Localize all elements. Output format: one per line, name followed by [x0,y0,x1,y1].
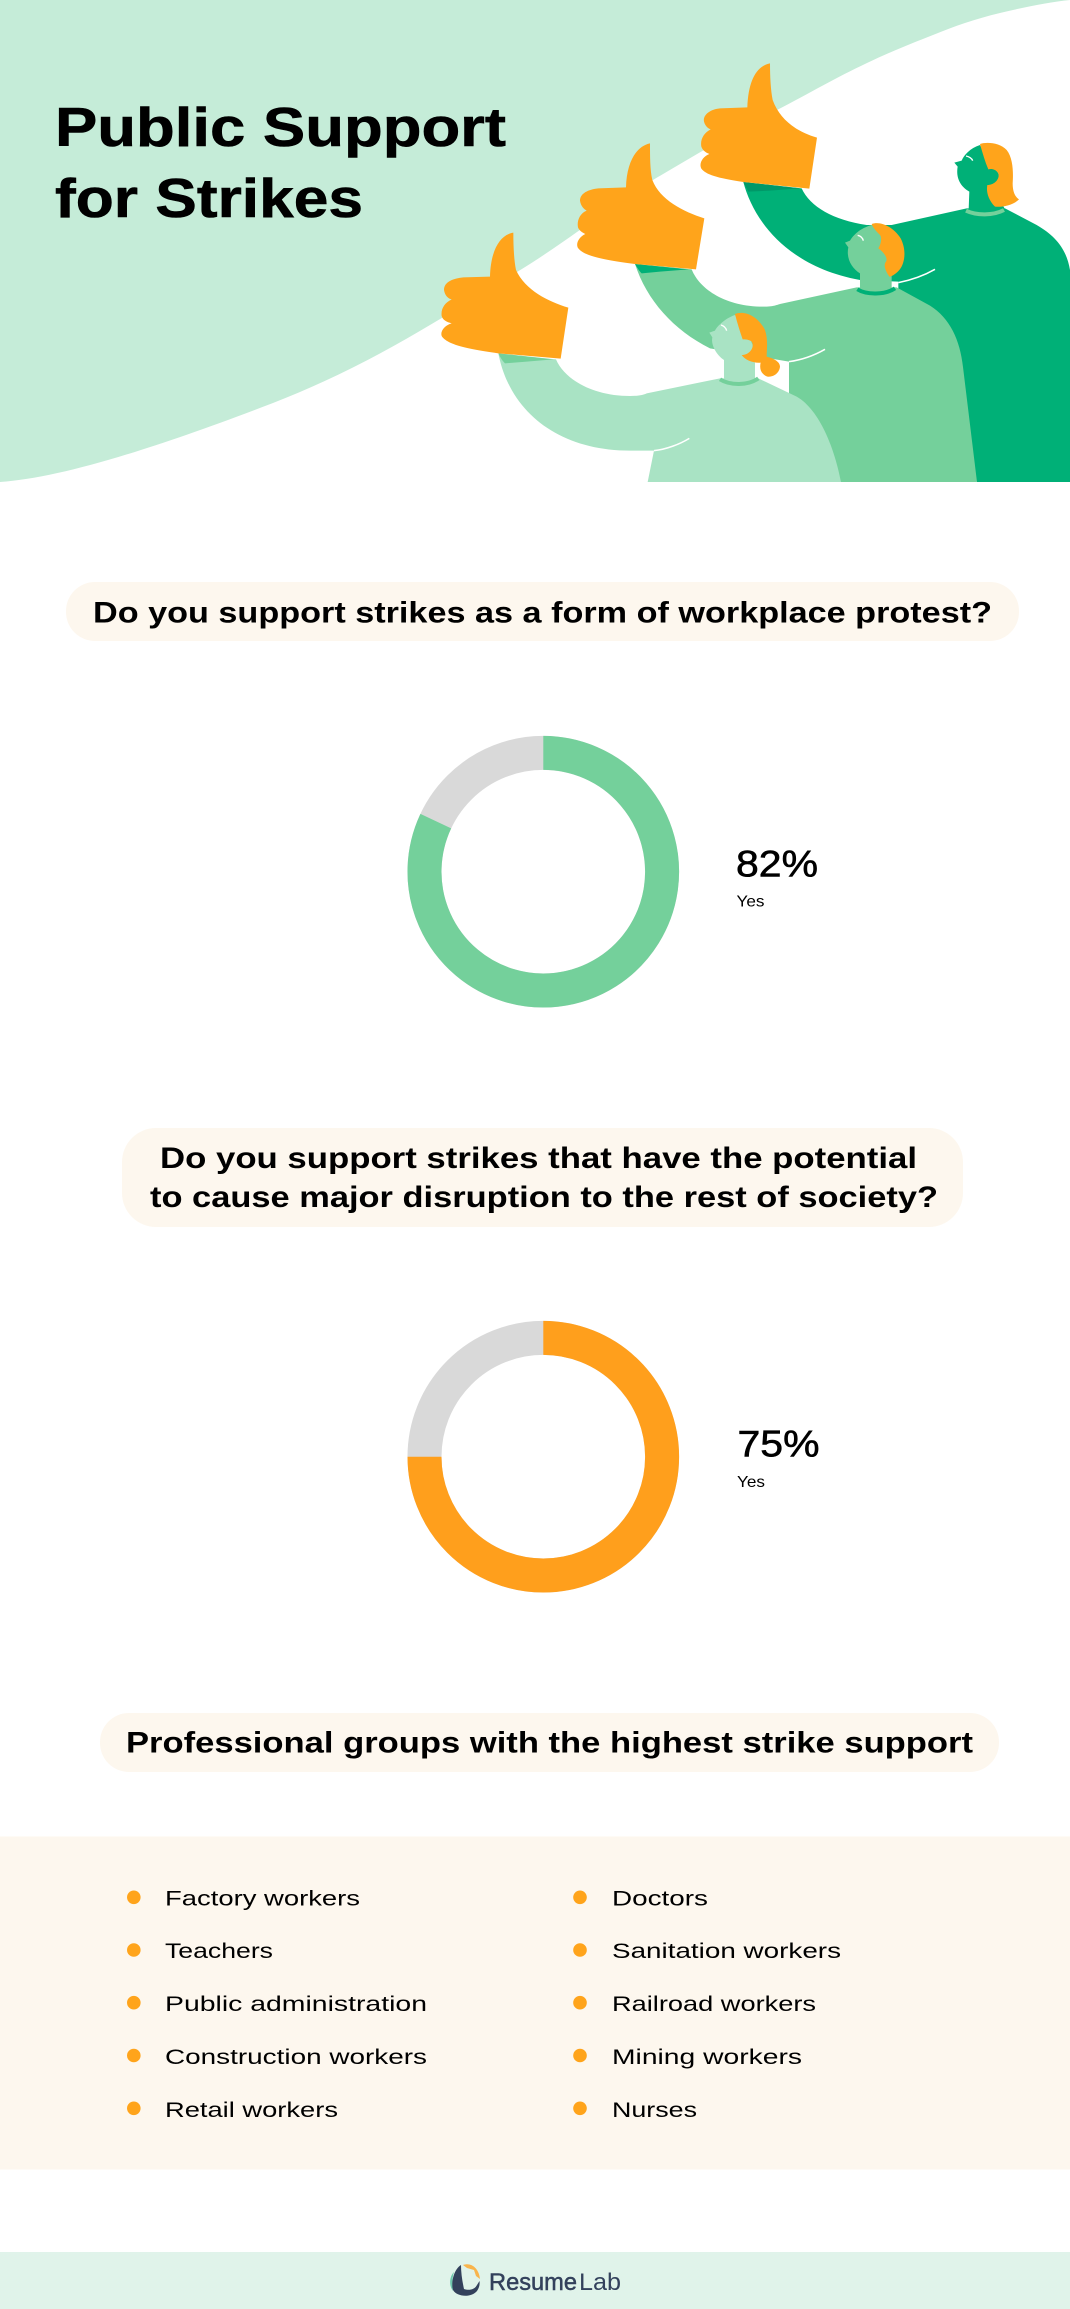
question 3 heading [100,1713,999,1772]
question 3 heading: Professional groups with the highest strike support [126,1726,973,1760]
list column: right: Sanitation workers [612,1940,841,1963]
list column: right: Mining workers [612,2046,802,2069]
stat: 75% yes: Yes [737,1474,765,1491]
list column: left [127,1887,427,2122]
stat: 82% yes [736,844,818,910]
icon: ResumeLab logo [450,2264,480,2296]
front figure [441,233,841,482]
logo wordmark: Lab [579,2269,621,2296]
donut chart: 75% [424,1338,662,1576]
title: Public Support [55,96,506,158]
wave background [0,0,1070,482]
title: for Strikes [55,167,363,229]
icon: thumbs up, top hand [700,63,817,189]
stat: 75% yes [737,1424,820,1491]
stat: 82% yes: 82% [736,844,818,884]
stat: 75% yes: 75% [738,1424,820,1464]
middle figure [577,143,977,482]
icon: thumbs up, lower hand [441,233,568,359]
stat: 82% yes: Yes [736,894,764,910]
title [55,96,506,229]
logo wordmark [489,2269,621,2296]
question 1 heading [66,582,1019,641]
logo wordmark: Resume [489,2269,577,2296]
question 2 heading: to cause major disruption to the rest of society? [150,1181,938,1214]
question 1 heading: Do you support strikes as a form of workplace protest? [93,596,992,630]
question 2 heading: Do you support strikes that have the potential [160,1142,917,1175]
footer [0,2252,1070,2309]
list column: left: Construction workers [165,2046,427,2069]
list column: left: Public administration [165,1993,427,2016]
list column: right: Doctors [612,1887,708,1910]
list column: left: Retail workers [165,2099,338,2122]
icon: thumbs up, middle hand [577,143,704,269]
header panel [0,0,1070,482]
list column: right: Railroad workers [612,1993,816,2016]
list column: right [573,1887,841,2122]
list column: left: Teachers [165,1940,273,1963]
question 2 heading [122,1128,963,1227]
back figure [700,63,1070,482]
panel: professional groups list [0,1836,1070,2170]
list column: right: Nurses [612,2099,697,2122]
donut chart: 82% [424,753,662,991]
list column: left: Factory workers [165,1887,360,1910]
illustration: three people giving thumbs up [441,63,1070,482]
